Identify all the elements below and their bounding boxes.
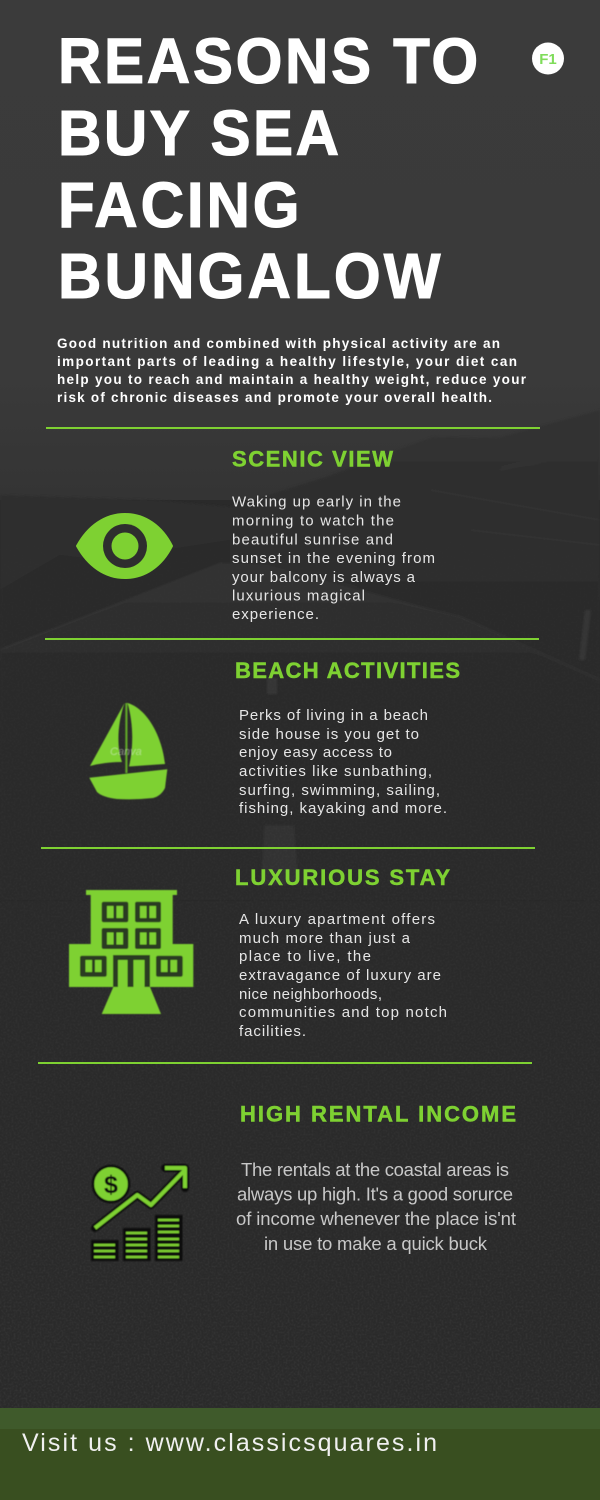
text: beach activities description: [239, 707, 447, 817]
intro paragraph: important parts of leading a healthy lifestyle, your diet can: [57, 354, 517, 369]
divider: top of luxurious stay: [41, 847, 535, 849]
text: luxurious stay description: place to live, the: [239, 948, 371, 965]
divider: top of beach activities: [45, 638, 539, 640]
divider: top of high rental income: [38, 1062, 532, 1064]
text: beach activities description: side house is you get to: [239, 726, 419, 743]
heading: high rental income: HIGH RENTAL INCOME: [240, 1102, 516, 1126]
title: REASONS TO: [58, 26, 478, 97]
text: luxurious stay description: facilities.: [239, 1023, 306, 1040]
heading: scenic view: SCENIC VIEW: [232, 446, 393, 472]
heading: beach activities: BEACH ACTIVITIES: [235, 658, 460, 683]
text: scenic view description: [232, 494, 435, 623]
text: luxurious stay description: A luxury apartment offers: [239, 911, 435, 928]
footer band: [0, 1408, 600, 1500]
text: luxurious stay description: much more than just a: [239, 930, 411, 947]
intro paragraph: risk of chronic diseases and promote your overall health.: [57, 390, 492, 405]
logo badge: F1: F1: [539, 51, 557, 68]
icon: sailboat: Canva: [110, 746, 142, 758]
icon: sailboat: [89, 703, 167, 799]
icon: coin, rising arrow and stacked coins: [91, 1166, 185, 1261]
panel: luxurious stay: [69, 865, 450, 1040]
text: beach activities description: Perks of living in a beach: [239, 707, 428, 724]
intro paragraph: [57, 336, 527, 405]
text: high rental income description: of income whenever the place is'nt: [236, 1208, 516, 1229]
text: scenic view description: your balcony is always a: [232, 569, 416, 586]
text: beach activities description: fishing, kayaking and more.: [239, 800, 447, 817]
text: scenic view description: sunset in the evening from: [232, 550, 435, 567]
text: high rental income description: [236, 1159, 516, 1254]
text: high rental income description: The rentals at the coastal areas is: [241, 1159, 509, 1180]
intro paragraph: Good nutrition and combined with physical activity are an: [57, 336, 500, 351]
icon: coin, rising arrow and stacked coins: $: [104, 1171, 118, 1199]
text: scenic view description: experience.: [232, 606, 319, 623]
text: scenic view description: beautiful sunrise and: [232, 531, 393, 548]
text: luxurious stay description: nice neighborhoods,: [239, 986, 382, 1003]
logo badge: F1: [532, 42, 564, 74]
text: beach activities description: surfing, swimming, sailing,: [239, 782, 440, 799]
panel: high rental income: [91, 1102, 516, 1261]
text: luxurious stay description: communities and top notch: [239, 1004, 447, 1021]
text: scenic view description: Waking up early in the: [232, 494, 401, 511]
text: luxurious stay description: extravagance of luxury are: [239, 967, 441, 984]
text: luxurious stay description: [239, 911, 447, 1040]
text: scenic view description: morning to watch the: [232, 513, 394, 530]
intro paragraph: help you to reach and maintain a healthy weight, reduce your: [57, 372, 527, 387]
text: beach activities description: activities like sunbathing,: [239, 763, 432, 780]
title: FACING: [58, 170, 300, 241]
title: BUNGALOW: [58, 241, 441, 312]
icon: building: [69, 890, 193, 1014]
footer website text: Visit us : www.classicsquares.in: [22, 1429, 437, 1457]
divider: top of scenic view: [46, 427, 540, 429]
icon: eye: [77, 514, 172, 578]
panel: scenic view: [77, 446, 435, 623]
title: BUY SEA: [58, 98, 339, 169]
text: beach activities description: enjoy easy access to: [239, 744, 392, 761]
title: [58, 26, 478, 312]
heading: luxurious stay: LUXURIOUS STAY: [235, 865, 450, 890]
text: high rental income description: in use to make a quick buck: [264, 1233, 488, 1254]
panel: beach activities: [89, 658, 460, 817]
text: scenic view description: luxurious magical: [232, 588, 365, 605]
text: high rental income description: always up high. It's a good sorurce: [237, 1184, 513, 1205]
